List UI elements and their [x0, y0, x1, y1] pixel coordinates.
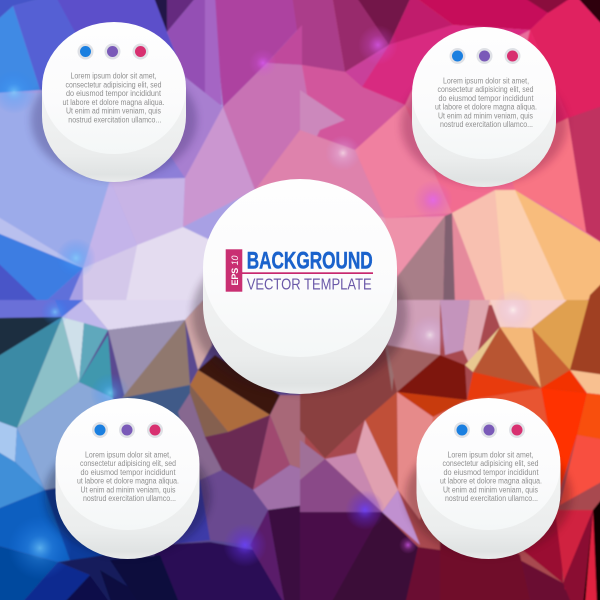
disc face [412, 27, 556, 159]
panel: bottom-left disc [44, 398, 210, 559]
bottom right [300, 512, 418, 600]
body text: do eiusmod tempor incididunt [444, 468, 539, 477]
body text: Lorem ipsum dolor sit amet, [70, 72, 156, 80]
badge: EPS 10 [226, 249, 242, 292]
body text: ut labore et dolore magna aliqua. [77, 477, 179, 486]
body text: consectetur adipisicing elit, sed [438, 85, 534, 94]
body text: consectetur adipisicing elit, sed [80, 459, 176, 468]
disc face [203, 179, 397, 357]
panel: top-left disc [31, 22, 197, 182]
middle centre [108, 320, 185, 398]
body text: Ut enim ad minim veniam, quis [438, 111, 533, 120]
body text: do eiusmod tempor incididunt [438, 94, 534, 103]
colour dots [454, 422, 525, 438]
body text: do eiusmod tempor incididunt [80, 468, 176, 477]
body text [440, 450, 542, 503]
disc shadow [192, 237, 408, 393]
heading rule [242, 272, 373, 274]
body text: ut labore et dolore magna aliqua. [435, 103, 537, 112]
disc face [56, 398, 200, 530]
disc shadow [44, 436, 210, 556]
disc face [42, 22, 186, 154]
colour dots [78, 44, 148, 60]
disc side [56, 464, 200, 559]
body text [77, 450, 179, 503]
body text: consectetur adipisicing elit, sed [66, 80, 162, 89]
colour dots [92, 422, 163, 438]
body text: Lorem ipsum dolor sit amet, [443, 76, 529, 85]
disc shadow [406, 436, 572, 556]
centre right [300, 345, 397, 458]
panel: central disc [192, 179, 408, 394]
body text: consectetur adipisicing elit, sed [442, 459, 538, 468]
badge: EPS 10: EPS 10 [230, 256, 240, 286]
body text [62, 72, 164, 124]
body text: Lorem ipsum dolor sit amet, [85, 450, 171, 459]
disc face [416, 398, 560, 530]
body text: nostrud exercitation ullamco... [68, 115, 161, 124]
subheading: VECTOR TEMPLATE: VECTOR TEMPLATE [247, 276, 372, 293]
panel: top-right disc [401, 27, 567, 187]
disc side [412, 93, 556, 187]
heading: BACKGROUND: BACKGROUND [247, 247, 373, 274]
body text: ut labore et dolore magna aliqua. [440, 477, 542, 486]
body text: nostrud exercitation ullamco... [440, 120, 533, 129]
body text: nostrud exercitation ullamco... [445, 494, 538, 503]
body text: nostrud exercitation ullamco... [83, 494, 176, 503]
middle left [0, 300, 62, 318]
disc side [203, 268, 397, 394]
disc side [42, 88, 186, 182]
body text: Ut enim ad minim veniam, quis [80, 485, 176, 494]
top centre [292, 0, 345, 72]
panel: bottom-right disc [406, 398, 572, 559]
disc shadow [31, 60, 197, 180]
top left [0, 0, 55, 22]
body text: Ut enim ad minim veniam, quis [66, 107, 161, 116]
body text: do eiusmod tempor incididunt [66, 89, 162, 98]
body text [435, 76, 537, 129]
disc shadow [401, 65, 567, 185]
body text: Ut enim ad minim veniam, quis [443, 485, 538, 494]
colour dots [450, 48, 520, 64]
top right [520, 0, 578, 13]
disc side [416, 464, 560, 559]
body text: ut labore et dolore magna aliqua. [62, 98, 164, 107]
body text: Lorem ipsum dolor sit amet, [448, 450, 534, 459]
